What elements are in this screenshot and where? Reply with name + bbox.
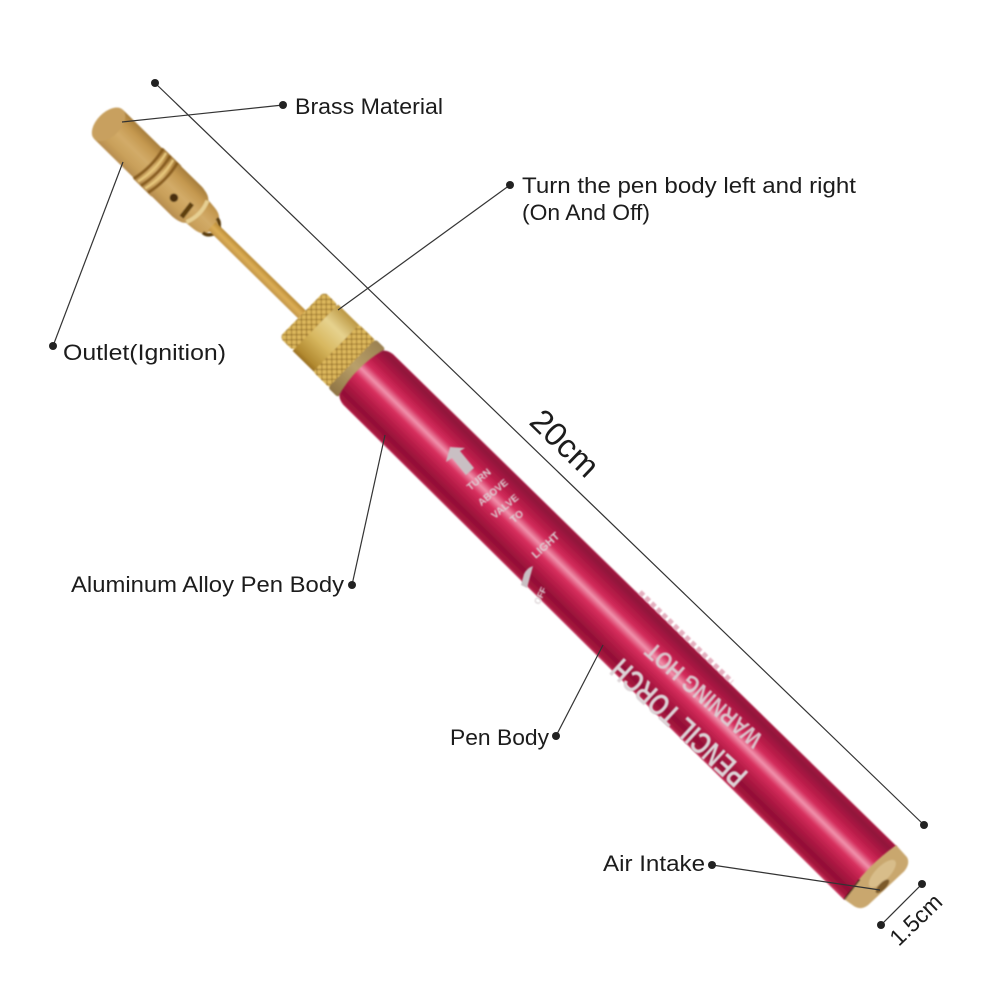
end cap [841,843,913,915]
callout: aluminum alloy pen body [71,435,385,597]
callout: on and off: (On And Off) [522,200,650,225]
arrow mark [446,447,474,475]
pen torch [85,101,913,916]
callout: brass material [122,94,443,122]
callout: pen body: Pen Body [450,725,549,750]
label: 1.5cm: 1.5cm [884,889,947,951]
brass nozzle [85,101,232,246]
callout: on and off [338,173,856,310]
knurled adjustment ring [278,290,386,397]
brass tube [208,222,307,320]
callout: brass material: Brass Material [295,94,443,119]
callout: air intake [603,851,880,890]
dimension line: diameter [877,880,926,929]
red aluminum pen body [332,343,913,916]
callout: pen body [450,645,603,750]
faint print band [640,592,732,682]
label: 20cm: 20cm [523,402,607,484]
body printing [446,447,768,794]
body printing: OFF [532,585,549,606]
callout: outlet: Outlet(Ignition) [63,340,226,365]
body printing: ABOVE [476,477,511,509]
callout: on and off: Turn the pen body left and right [522,173,856,198]
callout: outlet [49,162,226,365]
callout: air intake: Air Intake [603,851,705,876]
body printing: WARNING HOT [640,636,768,753]
body printing: TURN [465,467,494,493]
body printing: PENCIL TORCH [604,652,754,794]
body printing: VALVE [490,492,521,522]
body printing: TO [509,508,526,526]
body printing: LIGHT [530,530,562,561]
dimension line: length [151,79,928,829]
callout: aluminum alloy pen body: Aluminum Alloy Pen Body [71,572,344,597]
